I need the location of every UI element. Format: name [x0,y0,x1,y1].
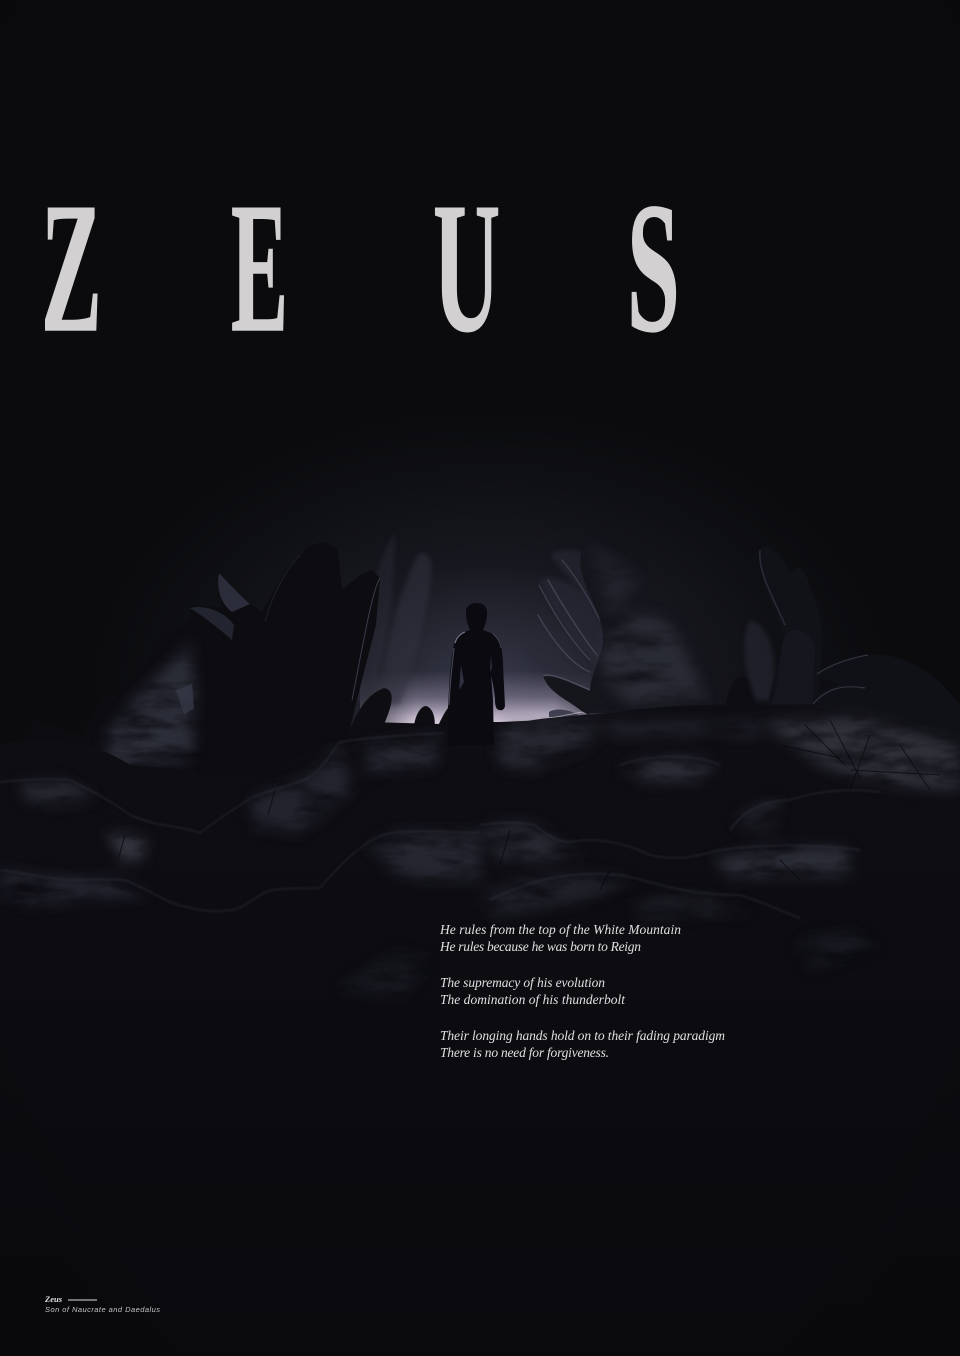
ghost fingers fill [530,550,774,700]
poem text: He rules from the top of the White Mountain [439,922,681,937]
figure silhouette [448,603,505,745]
poem text: Their longing hands hold on to their fading paradigm [440,1028,725,1043]
terrain [0,704,960,1356]
credit: Son of Naucrate and Daedalus [45,1305,160,1314]
horizon glow [360,670,610,724]
credit: Zeus [44,1294,63,1304]
rock ridge lines [0,733,880,918]
letter S: S [627,164,680,370]
ghost fingers behind the figure [352,532,431,705]
lit rock patches [0,716,960,998]
credit [44,1294,160,1314]
lying hand [812,655,960,760]
letter U: U [433,164,500,370]
left hand [0,542,380,800]
poem text: He rules because he was born to Reign [439,939,641,954]
letter Z: Z [41,164,102,371]
rear horizon ridge [365,714,590,745]
far right hand [759,547,823,706]
poem text: The domination of his thunderbolt [440,992,626,1007]
rock cracks [118,720,940,890]
poem text: There is no need for forgiveness. [440,1045,609,1060]
poem text [439,922,725,1060]
title: ZEUS [41,164,680,371]
right hand [540,543,714,720]
poem text: The supremacy of his evolution [440,975,605,990]
small stones on the horizon [347,676,755,745]
right ghost finger strokes [538,555,785,672]
letter E: E [231,166,288,371]
